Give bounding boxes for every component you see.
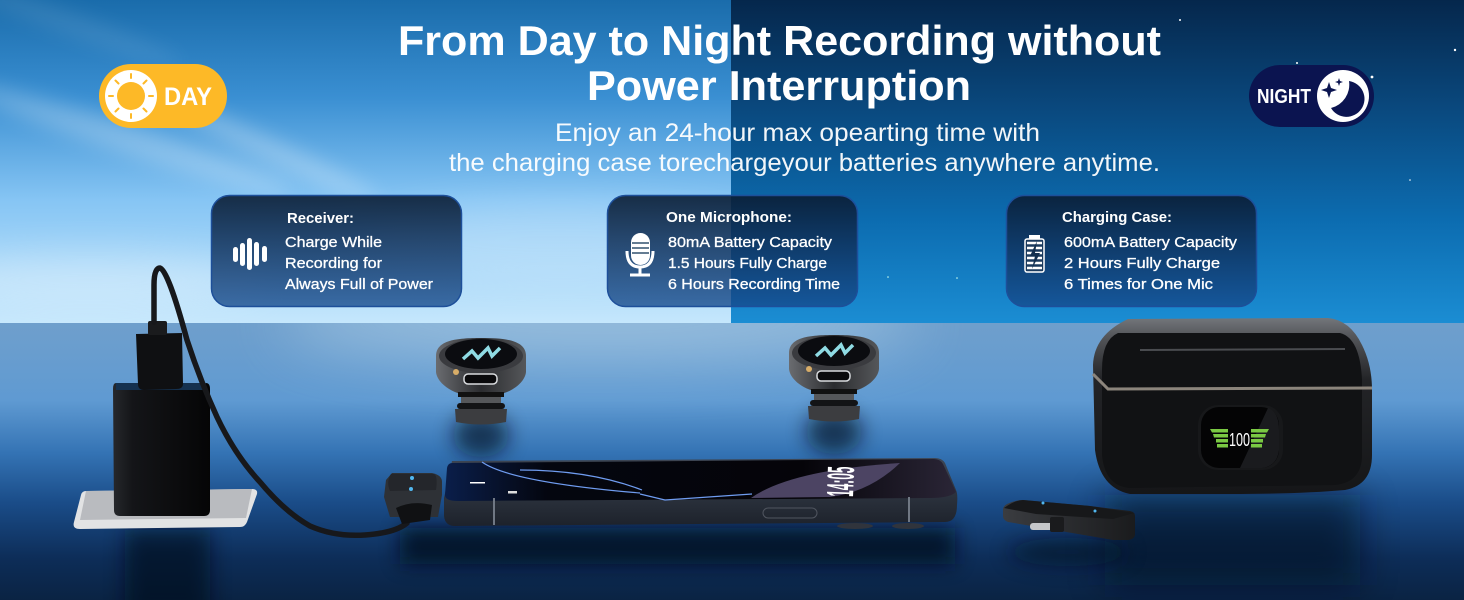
panel text: charging case: 2 Hours Fully Charge [1064, 256, 1220, 272]
night badge [1249, 65, 1374, 127]
receiver on table [1003, 500, 1135, 540]
subtitle: the charging case torechargeyour batteries anywhere anytime. [449, 149, 1160, 177]
panel text: one microphone: 1.5 Hours Fully Charge [668, 256, 827, 272]
receiver plugged into phone [384, 473, 442, 524]
charging cable [154, 268, 407, 535]
panel: receiver [212, 196, 462, 306]
panel text: receiver: Always Full of Power [285, 277, 433, 293]
charger plug [136, 333, 183, 390]
day badge [99, 64, 227, 128]
title: From Day to Night Recording without [398, 17, 1161, 64]
wall plate [74, 489, 257, 529]
microphone right [789, 335, 879, 422]
icon: sun [105, 70, 157, 122]
background: day sky [0, 0, 760, 323]
battery level bars [1210, 429, 1269, 448]
icon: microphone [627, 233, 653, 275]
icon: moon and stars [1317, 70, 1369, 122]
panel: charging case [1006, 196, 1256, 306]
day badge: DAY [164, 83, 212, 111]
title: Power Interruption [587, 62, 971, 109]
charger [113, 321, 210, 516]
background: reflective table surface [0, 323, 1464, 590]
phone [444, 458, 957, 529]
text: 14:05 [820, 466, 863, 497]
night badge: NIGHT [1257, 86, 1311, 108]
case display: 100 [1229, 430, 1250, 450]
panel text: receiver [285, 235, 433, 293]
panel text: one microphone: 80mA Battery Capacity [668, 235, 833, 251]
icon: sound wave [233, 238, 267, 270]
title [398, 17, 1161, 109]
panel heading: charging case: Charging Case: [1062, 210, 1172, 226]
panel text: charging case: 6 Times for One Mic [1064, 277, 1213, 293]
panel heading: receiver: Receiver: [287, 211, 354, 227]
panel heading: one microphone: One Microphone: [666, 210, 792, 226]
panel text: charging case [1064, 235, 1238, 293]
background: night sky [731, 0, 1464, 323]
microphone left [436, 338, 526, 424]
subtitle [449, 119, 1160, 177]
panel text: receiver: Charge While [285, 235, 382, 251]
panel text: one microphone [668, 235, 840, 293]
panel text: charging case: 600mA Battery Capacity [1064, 235, 1238, 251]
icon: battery [1025, 235, 1044, 272]
panel text: one microphone: 6 Hours Recording Time [668, 277, 840, 293]
reflections on the table [125, 410, 1360, 600]
panel text: receiver: Recording for [285, 256, 382, 272]
case display [1198, 405, 1283, 470]
subtitle: Enjoy an 24-hour max opearting time with [555, 119, 1040, 147]
charging case [1093, 318, 1372, 494]
panel: one microphone [608, 196, 858, 306]
